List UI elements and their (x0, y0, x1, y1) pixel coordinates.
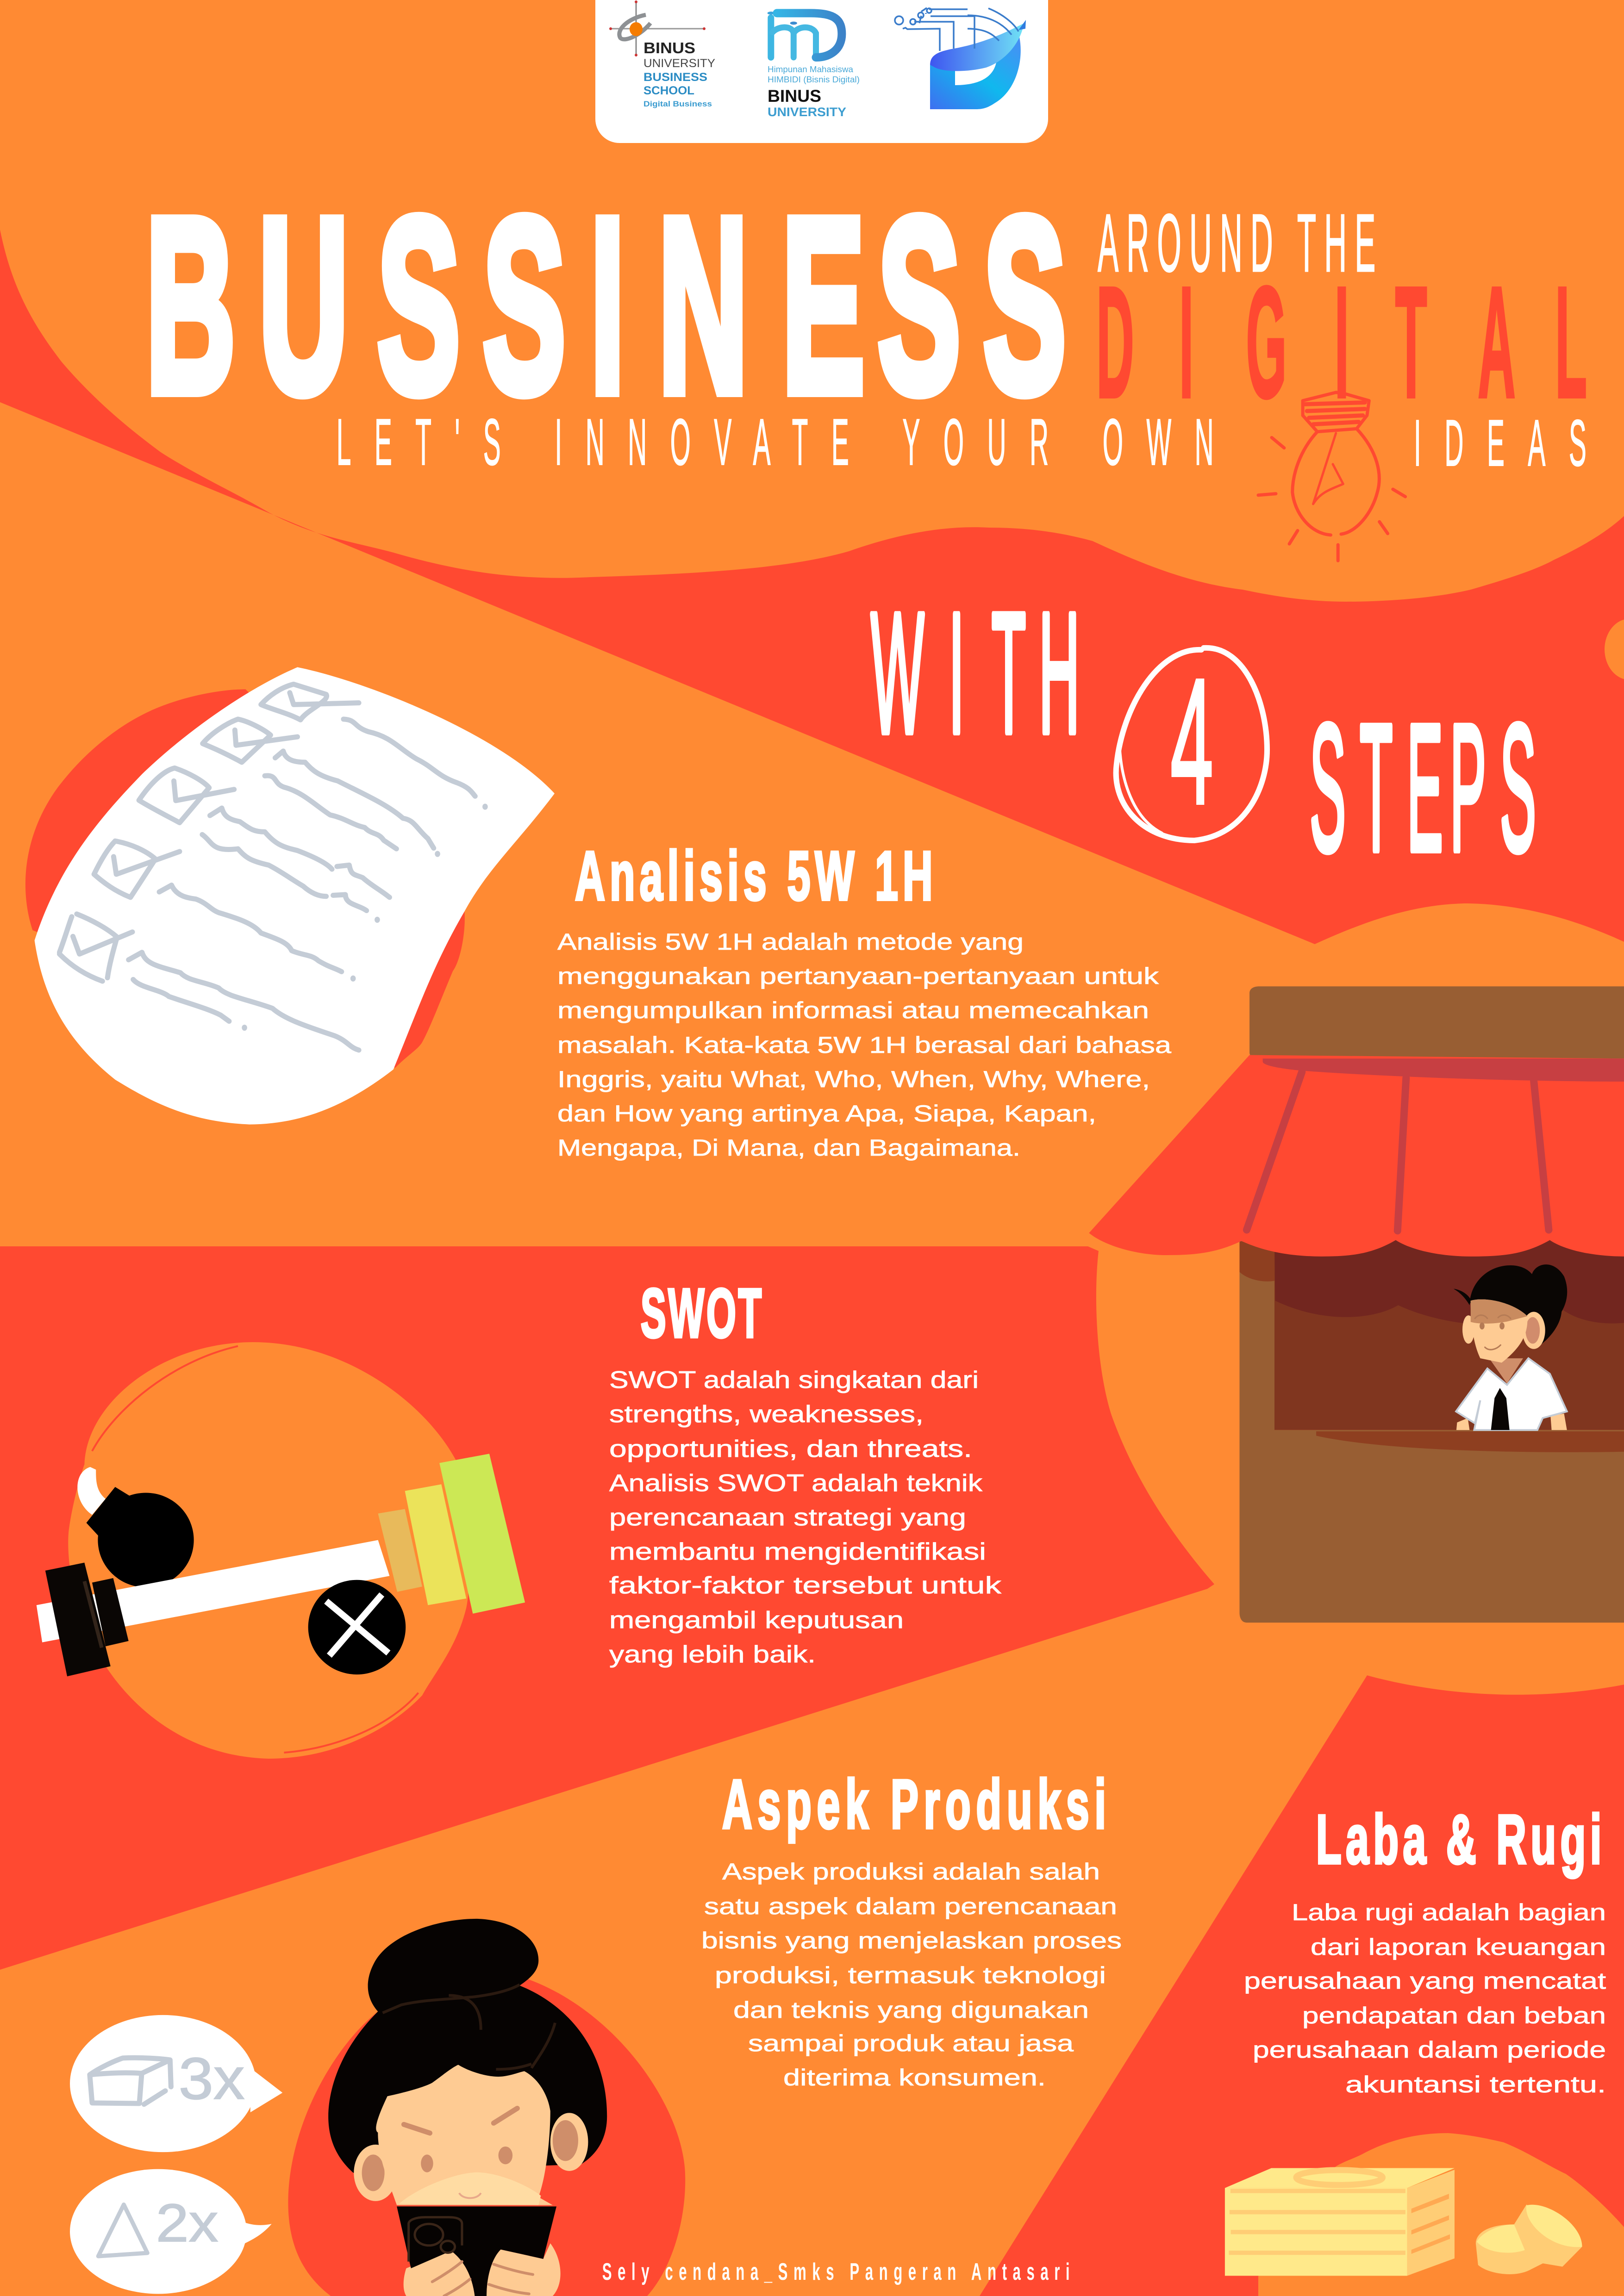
seller (1454, 1264, 1567, 1430)
red blob behind girl (288, 1978, 685, 2296)
heading: STEPS: STEPS (1310, 687, 1536, 889)
body text: Laba rugi adalah bagian (1292, 1899, 1606, 1925)
body text: pendapatan dan beban (1302, 2003, 1606, 2028)
body text: perusahaan yang mencatat (1244, 1968, 1606, 1994)
hair (328, 1985, 607, 2173)
red panel: SWOT background (0, 1246, 1214, 1970)
stall booth body (1239, 1241, 1624, 1623)
title: BUSSINESS: BUSSINESS (146, 166, 1066, 444)
awning shadow band (1263, 1058, 1624, 1082)
ears (354, 2113, 588, 2201)
body text: perusahaan dalam periode (1253, 2037, 1606, 2063)
body text: yang lebih baik. (609, 1641, 816, 1668)
red blob behind paper (25, 689, 465, 1068)
hair bun (368, 1919, 538, 2011)
body text: Analisis SWOT adalah teknik (609, 1470, 983, 1497)
illustration: SWOT hammer and bomb (37, 1342, 525, 1759)
body text: Aspek produksi adalah salah (722, 1859, 1100, 1885)
logo: BINUS Business School (609, 0, 715, 108)
bomb (87, 1487, 194, 1587)
logo: HIMBIDI (768, 12, 860, 119)
body text: opportunities, dan threats. (609, 1436, 972, 1462)
side bands (1412, 2194, 1450, 2254)
body text: perencanaan strategi yang (609, 1504, 966, 1531)
black clamp (45, 1562, 129, 1676)
facial features (404, 2108, 517, 2198)
logo: HIMBIDI: Himpunan Mahasiswa (768, 65, 854, 74)
heading: Laba & Rugi (1316, 1801, 1602, 1879)
face shade (1471, 1300, 1527, 1324)
box top (1225, 2168, 1455, 2188)
panel: SWOT (609, 1274, 1002, 1668)
speech bubble: 3x: 3x (179, 2046, 245, 2111)
tie (1491, 1388, 1510, 1430)
hands (404, 2243, 561, 2296)
arms (1456, 1413, 1567, 1430)
body text (557, 929, 1171, 1161)
body text: Analisis 5W 1H adalah metode yang (557, 929, 1024, 955)
logo panel (595, 0, 1048, 143)
body text: mengambil keputusan (609, 1607, 904, 1634)
hair back (1469, 1264, 1567, 1346)
body text: menggunakan pertanyaan-pertanyaan untuk (557, 963, 1159, 989)
red panel: Laba & Rugi background (980, 1675, 1624, 2296)
orange blob (68, 1342, 469, 1759)
body text (701, 1859, 1122, 2091)
logo: digital D (895, 8, 1026, 109)
logo: BINUS Business School: BINUS (643, 39, 695, 56)
body text: dan How yang artinya Apa, Siapa, Kapan, (557, 1101, 1096, 1126)
ears (1462, 1315, 1474, 1344)
shirt (1456, 1358, 1567, 1430)
logo: BINUS Business School: SCHOOL (643, 84, 694, 97)
logo: BINUS Business School: UNIVERSITY (643, 57, 715, 70)
body text (609, 1367, 1002, 1668)
body text: dari laporan keuangan (1311, 1934, 1606, 1960)
front bands (1229, 2189, 1405, 2255)
logo: HIMBIDI: BINUS (768, 87, 821, 106)
badge: number 4 in circle (1116, 642, 1267, 841)
awning shadow in window (1274, 1237, 1624, 1325)
heading: SWOT (641, 1274, 762, 1352)
body text: produksi, termasuk teknologi (715, 1962, 1106, 1988)
logo: BINUS Business School: BUSINESS (643, 71, 707, 84)
close button (308, 1580, 406, 1674)
phone (397, 2207, 556, 2296)
subtitle: LET'S INNOVATE YOUR OWN: LET'S INNOVATE YOUR OWN (337, 405, 1214, 479)
credit line: Sely cendana_Smks Pangeran Antasari (602, 2259, 1070, 2285)
illustration: checklist paper (25, 667, 555, 1125)
heading: Aspek Produksi (722, 1766, 1106, 1843)
body text: diterima konsumen. (783, 2065, 1046, 2091)
speech bubble: 2x: 2x (156, 2193, 218, 2253)
panel: Laba & Rugi (1244, 1801, 1606, 2097)
corner shade (1239, 1241, 1274, 1282)
face (376, 2065, 553, 2205)
panel: Aspek Produksi (701, 1766, 1122, 2091)
body text: bisnis yang menjelaskan proses (701, 1928, 1122, 1954)
top ring (1296, 2170, 1382, 2185)
white paper (35, 667, 555, 1125)
facial details (1475, 1315, 1511, 1350)
orange blob behind money (1258, 2133, 1624, 2296)
counter shade (1316, 1431, 1624, 1452)
title: DIGITAL: DIGITAL (1096, 254, 1587, 431)
red wave band: header to steps (0, 230, 1624, 944)
illustration: market stall with seller (1089, 986, 1624, 1623)
hair strands (383, 1985, 555, 2069)
speech bubble: 2x (70, 2169, 272, 2294)
awning ribs (1247, 1072, 1549, 1231)
badge: number 4 in circle: 4 (1170, 642, 1213, 841)
title: AROUND THE: AROUND THE (1098, 198, 1375, 289)
box front (1225, 2188, 1407, 2276)
illustration: girl with phone and speech bubbles (70, 1919, 685, 2296)
logo: HIMBIDI: HIMBIDI (Bisnis Digital) (768, 75, 860, 84)
body text: faktor-faktor tersebut untuk (609, 1572, 1002, 1599)
illustration: money stack and coins (1225, 2168, 1582, 2276)
body text (1244, 1899, 1606, 2097)
neck (1489, 1358, 1523, 1383)
body text: SWOT adalah singkatan dari (609, 1367, 979, 1394)
hair wisp (1454, 1289, 1471, 1305)
handle bar (37, 1540, 389, 1643)
body text: satu aspek dalam perencanaan (704, 1893, 1117, 1919)
coloured handle rings (378, 1509, 422, 1592)
awning header bar (1249, 986, 1624, 1058)
body text: sampai produk atau jasa (748, 2030, 1074, 2056)
heading: WITH: WITH (871, 578, 1080, 769)
speech bubble: 3x (70, 2015, 282, 2152)
body text: mengumpulkan informasi atau memecahkan (557, 997, 1149, 1023)
box right side (1407, 2170, 1455, 2276)
window interior (1274, 1237, 1624, 1430)
decorative orange circle at right edge (1605, 619, 1624, 680)
end dots (242, 804, 488, 1031)
body text: dan teknis yang digunakan (733, 1997, 1089, 2023)
phone glow (399, 2172, 541, 2205)
body text: Inggris, yaitu What, Who, When, Why, Where, (557, 1066, 1150, 1092)
finger lines (432, 2262, 533, 2296)
awning canopy (1089, 1055, 1624, 1257)
panel: Analisis 5W 1H (557, 837, 1171, 1161)
body text: strengths, weaknesses, (609, 1401, 924, 1428)
icon: light bulb (1258, 392, 1405, 561)
face (1471, 1300, 1527, 1363)
subtitle: IDEAS: IDEAS (1414, 406, 1587, 479)
checklist marks (59, 684, 475, 1050)
body text: akuntansi tertentu. (1345, 2072, 1606, 2097)
body text: Mengapa, Di Mana, dan Bagaimana. (557, 1135, 1020, 1161)
logo: BINUS Business School: Digital Business (643, 100, 712, 108)
bomb fuse (77, 1467, 106, 1515)
coins (1476, 2204, 1582, 2274)
body text: membantu mengidentifikasi (609, 1538, 986, 1565)
heading: Analisis 5W 1H (575, 837, 933, 915)
logo: HIMBIDI: UNIVERSITY (768, 105, 846, 119)
body text: masalah. Kata-kata 5W 1H berasal dari bahasa (557, 1032, 1171, 1058)
